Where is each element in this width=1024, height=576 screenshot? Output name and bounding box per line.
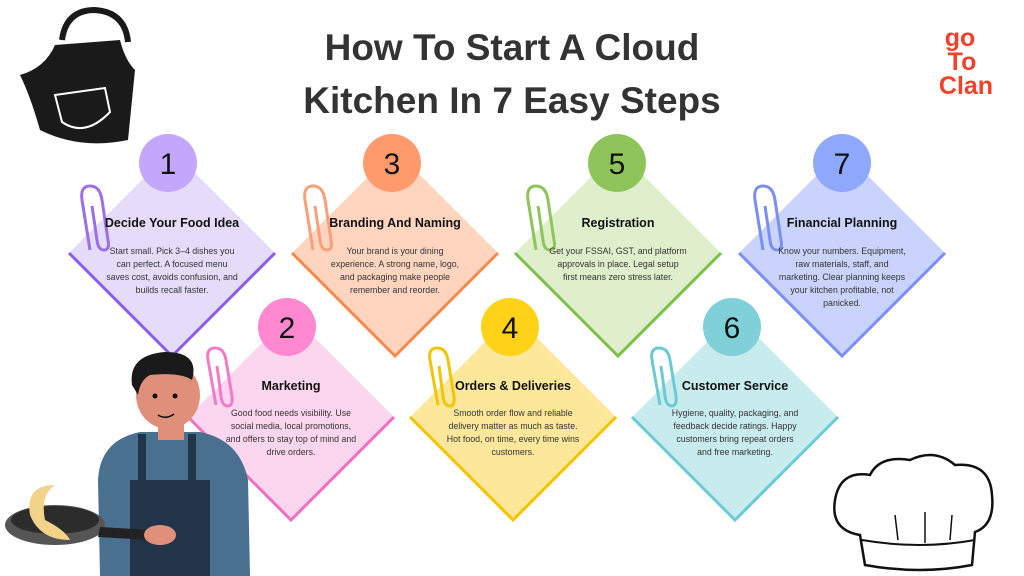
step 4: 4 bbox=[502, 312, 518, 345]
step 1: Start small. Pick 3–4 dishes you bbox=[110, 246, 234, 256]
step 3: 3 bbox=[384, 148, 400, 181]
step 1: builds recall faster. bbox=[136, 285, 208, 295]
step 4: Orders & Deliveries bbox=[455, 379, 571, 393]
step 2: 2 bbox=[279, 312, 295, 345]
step 6: feedback decide ratings. Happy bbox=[673, 421, 797, 431]
step 1 bbox=[69, 134, 275, 356]
step 6: Hygiene, quality, packaging, and bbox=[672, 408, 798, 418]
logo bbox=[939, 24, 993, 100]
step 5: Registration bbox=[582, 216, 654, 230]
step 4: customers. bbox=[491, 447, 535, 457]
title: Kitchen In 7 Easy Steps bbox=[303, 80, 721, 121]
step 7 bbox=[739, 134, 945, 356]
step 4: Smooth order flow and reliable bbox=[453, 408, 573, 418]
step 5: first means zero stress later. bbox=[563, 272, 673, 282]
step 7: raw materials, staff, and bbox=[795, 259, 889, 269]
step 6: 6 bbox=[724, 312, 740, 345]
step 6: customers bring repeat orders bbox=[676, 434, 794, 444]
step 7: panicked. bbox=[823, 298, 861, 308]
logo: To bbox=[948, 48, 976, 76]
step 6 bbox=[632, 298, 838, 520]
step 1: 1 bbox=[160, 148, 176, 181]
icon: chef with pan bbox=[5, 352, 250, 576]
step 1: Decide Your Food Idea bbox=[105, 216, 240, 230]
step 2: social media, local promotions, bbox=[231, 421, 351, 431]
step 7: Financial Planning bbox=[787, 216, 897, 230]
title bbox=[303, 27, 721, 121]
step 2 bbox=[188, 298, 394, 520]
step 6: Customer Service bbox=[682, 379, 788, 393]
step 5: 5 bbox=[609, 148, 625, 181]
icon: apron bbox=[20, 10, 135, 143]
step 4: delivery matter as much as taste. bbox=[448, 421, 578, 431]
step 3: and packaging make people bbox=[340, 272, 450, 282]
step 3: Branding And Naming bbox=[329, 216, 461, 230]
step 2: and offers to stay top of mind and bbox=[226, 434, 356, 444]
step 7: 7 bbox=[834, 148, 850, 181]
step 7: marketing. Clear planning keeps bbox=[779, 272, 906, 282]
title: How To Start A Cloud bbox=[325, 27, 699, 68]
step 1: can perfect. A focused menu bbox=[116, 259, 228, 269]
step 4 bbox=[410, 298, 616, 520]
step 4: Hot food, on time, every time wins bbox=[447, 434, 580, 444]
step 3: experience. A strong name, logo, bbox=[331, 259, 459, 269]
logo: Clan bbox=[939, 72, 993, 100]
step 5: Get your FSSAI, GST, and platform bbox=[549, 246, 687, 256]
step 7: Know your numbers. Equipment, bbox=[778, 246, 906, 256]
step 3 bbox=[292, 134, 498, 356]
step 2: drive orders. bbox=[267, 447, 315, 457]
step 5 bbox=[515, 134, 721, 356]
step 2: Good food needs visibility. Use bbox=[231, 408, 351, 418]
logo: go bbox=[945, 24, 975, 52]
step 5: approvals in place. Legal setup bbox=[557, 259, 679, 269]
step 2: Marketing bbox=[261, 379, 321, 393]
icon: chef hat bbox=[834, 455, 992, 570]
step 6: and free marketing. bbox=[697, 447, 773, 457]
step 3: remember and reorder. bbox=[350, 285, 440, 295]
step 1: saves cost, avoids confusion, and bbox=[106, 272, 238, 282]
step 3: Your brand is your dining bbox=[346, 246, 444, 256]
step 7: your kitchen profitable, not bbox=[790, 285, 894, 295]
